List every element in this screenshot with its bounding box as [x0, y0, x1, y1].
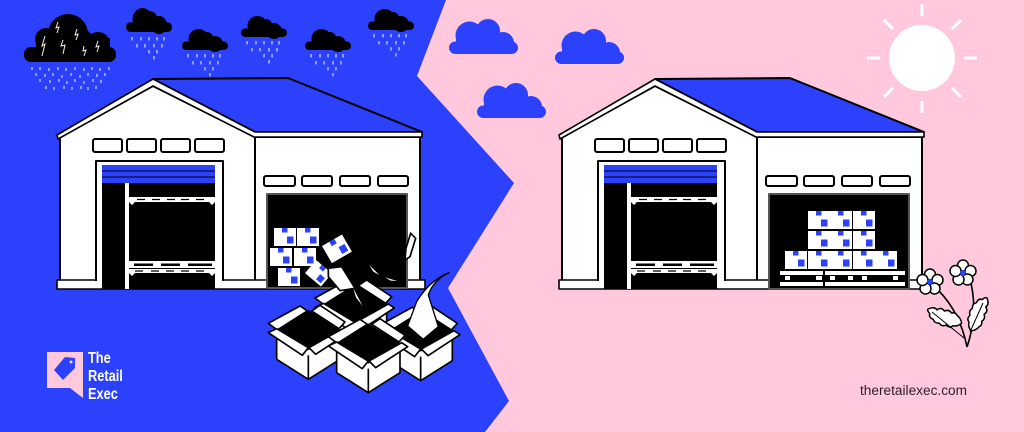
- left flower: [917, 269, 943, 294]
- icon: rain cloud 2: [182, 29, 228, 76]
- icon: rain cloud 4: [305, 29, 351, 76]
- plinth: [559, 280, 927, 289]
- loading bay with spilled boxes: [267, 194, 407, 288]
- curling sheet: [408, 273, 449, 339]
- website address: theretailexec.com: [860, 383, 967, 398]
- warehouse walls: [562, 86, 922, 281]
- logo wordmark: Exec: [88, 386, 118, 403]
- warehouse fascia: [559, 79, 924, 139]
- warehouse roof: [153, 78, 422, 132]
- pile of open cardboard boxes: [268, 233, 460, 393]
- loading bay with stacked boxes on pallet: [769, 194, 909, 289]
- logo mark: [47, 352, 83, 398]
- icon: blue cloud 3: [477, 83, 546, 118]
- roller door bay: [96, 161, 223, 289]
- background: sunny pink side: [417, 0, 1024, 432]
- icon: sun: [867, 4, 977, 113]
- icon: blue cloud 1: [449, 19, 518, 54]
- left leaf: [924, 300, 964, 334]
- icon: rain cloud 1: [126, 8, 172, 60]
- upper windows: [93, 139, 408, 186]
- icon: rain cloud 5: [368, 9, 414, 56]
- warehouse roof: [655, 78, 924, 132]
- roller door bay: [598, 161, 725, 289]
- warehouse walls: [60, 86, 420, 281]
- warehouse fascia: [57, 79, 422, 139]
- icon: thunderstorm cloud: [24, 14, 116, 90]
- warehouse: left, damaged stock: [57, 78, 425, 289]
- icon: flowers: [917, 260, 996, 347]
- warehouse: right, tidy stock: [559, 78, 927, 289]
- logo wordmark: The: [88, 350, 111, 367]
- right leaf: [960, 294, 996, 334]
- upper windows: [595, 139, 910, 186]
- right flower: [950, 260, 976, 285]
- plinth: [57, 280, 425, 289]
- icon: rain cloud 3: [241, 16, 287, 64]
- icon: blue cloud 2: [555, 29, 624, 64]
- logo wordmark: Retail: [88, 368, 123, 385]
- logo: The Retail Exec: [47, 350, 123, 403]
